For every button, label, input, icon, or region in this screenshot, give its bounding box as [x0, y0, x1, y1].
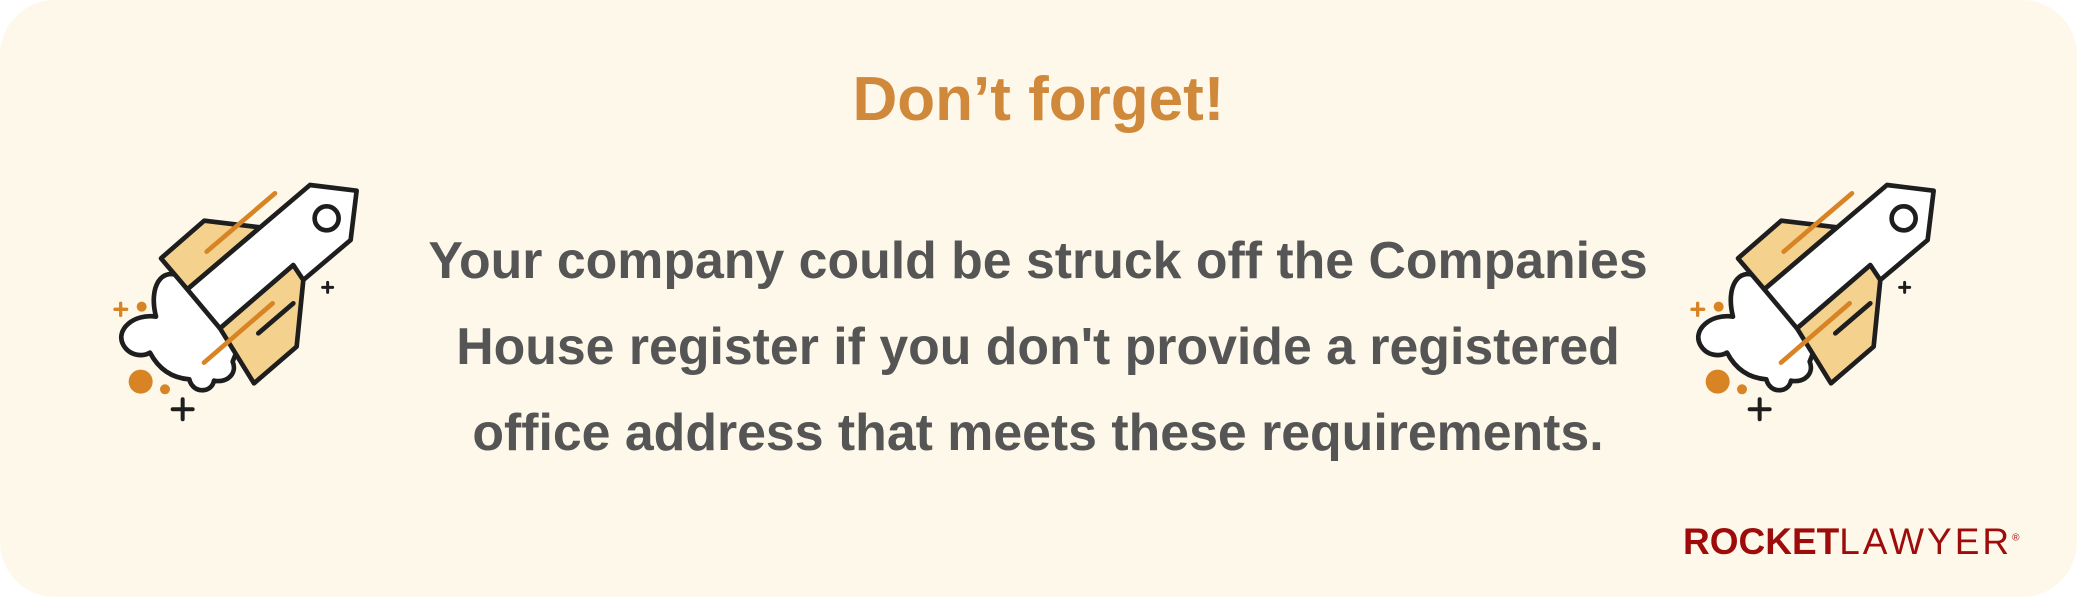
logo: ROCKETLAWYER®: [1683, 521, 2020, 562]
text block: [428, 231, 1648, 461]
text block: Your company could be struck off the Companies: [428, 231, 1648, 289]
text block: office address that meets these requirements.: [472, 403, 1604, 461]
title: Don’t forget!: [853, 65, 1224, 134]
icon: right rocket: [1692, 185, 1934, 419]
text block: House register if you don't provide a registered: [456, 317, 1620, 375]
icon: left rocket: [115, 185, 357, 419]
